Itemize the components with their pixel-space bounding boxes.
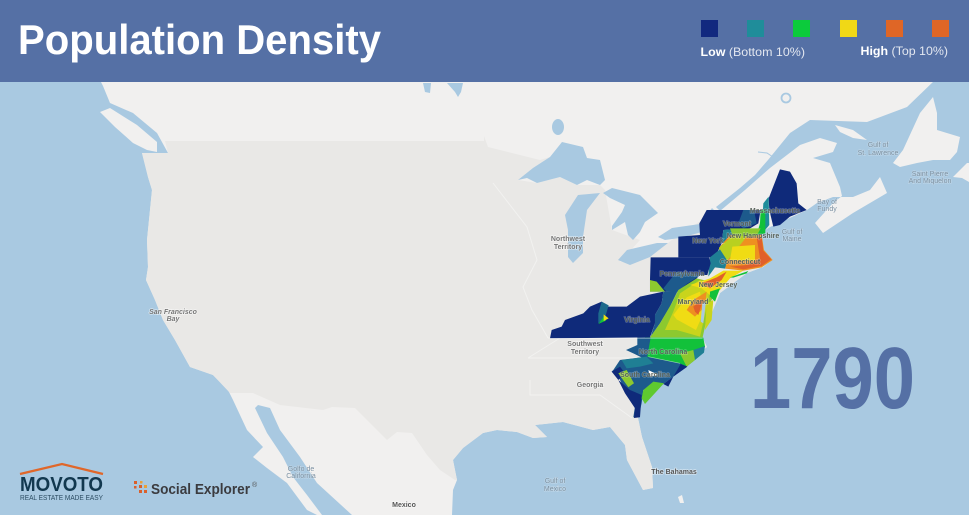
label: Gulf of St. Lawrence: St. Lawrence — [858, 150, 899, 157]
land: Anticosti Island — [835, 125, 867, 140]
label: Gulf of Maine: Maine — [782, 236, 802, 243]
label: Golfo de California: Golfo de — [288, 466, 314, 473]
label: Saint Pierre and Miquelon: Saint Pierre — [912, 171, 948, 178]
water: northern lakes — [552, 119, 564, 135]
Pennsylvania — [650, 257, 711, 292]
logo: Movoto: REAL ESTATE MADE EASY — [20, 493, 103, 502]
label: Maryland: Maryland — [678, 299, 708, 306]
label: New Jersey: New Jersey — [699, 282, 737, 289]
legend — [700, 20, 949, 59]
label: San Francisco Bay: Bay — [167, 316, 181, 323]
label: Gulf of St. Lawrence: Gulf of — [868, 142, 888, 149]
label: Pennsylvania: Pennsylvania — [660, 271, 704, 278]
label: Gulf of Mexico: Gulf of — [545, 478, 565, 485]
New York — [678, 210, 761, 257]
year: 1790: 1790 — [750, 330, 915, 427]
land: United States interior — [142, 136, 772, 490]
label: New Hampshire: New Hampshire — [727, 233, 779, 240]
label: Virginia: Virginia — [624, 317, 650, 324]
label: Northwest Territory: Northwest — [551, 236, 585, 243]
label: Massachusetts: Massachusetts — [750, 208, 800, 215]
label: Bay of Fundy: Fundy — [817, 206, 837, 213]
label: Gulf of Mexico: Mexico — [544, 486, 566, 493]
southern New England base — [718, 235, 773, 271]
logo: Movoto — [20, 464, 103, 502]
label: San Francisco Bay: San Francisco — [149, 309, 197, 316]
legend label: high: High (Top 10%) — [860, 44, 948, 58]
Virginia and Kentucky — [550, 292, 663, 338]
label: Saint Pierre and Miquelon: And Miquelon — [909, 178, 952, 185]
Connecticut valley — [730, 228, 761, 237]
label: Georgia: Georgia — [577, 382, 603, 389]
land: North America mainland — [100, 80, 935, 515]
label: Bay of Fundy: Bay of — [817, 199, 837, 206]
label: New York: New York — [692, 238, 724, 245]
label: Golfo de California: California — [286, 473, 316, 480]
water: Lake Superior — [518, 142, 605, 185]
label: Vermont: Vermont — [723, 221, 752, 228]
choropleth: population density by county, 1790 — [550, 169, 807, 418]
North Carolina — [645, 338, 705, 367]
title: Population Density — [18, 16, 382, 63]
logo: Movoto: MOVOTO — [20, 474, 103, 496]
South Carolina — [612, 357, 687, 417]
label: Mexico: Mexico — [392, 502, 416, 509]
New England inland strips — [762, 197, 769, 234]
label: North Carolina: North Carolina — [639, 349, 687, 356]
water: Lake Huron — [603, 188, 658, 240]
logo: Social Explorer: Social Explorer — [151, 481, 250, 498]
territory borders — [493, 183, 650, 418]
label: The Bahamas: The Bahamas — [651, 469, 697, 476]
label: Gulf of Maine: Gulf of — [782, 229, 802, 236]
water: Lake Ontario — [658, 208, 716, 240]
Chesapeake piedmont — [650, 278, 717, 337]
water: Lake Erie — [618, 243, 668, 265]
Hudson valley — [708, 249, 727, 277]
Maine — [769, 169, 807, 227]
label: Connecticut: Connecticut — [720, 259, 761, 266]
legend label: low: Low (Bottom 10%) — [700, 45, 805, 59]
label: Southwest Territory: Territory — [571, 349, 599, 356]
state border lines — [550, 317, 703, 363]
label: Northwest Territory: Territory — [554, 244, 582, 251]
map labels — [149, 142, 952, 509]
label: South Carolina: South Carolina — [620, 372, 670, 379]
header bar — [0, 0, 969, 82]
Delaware peninsula and New Jersey — [705, 300, 713, 330]
land: Newfoundland — [893, 97, 960, 167]
water: Lake Michigan — [565, 193, 600, 263]
logo: Social Explorer: ® — [252, 481, 258, 489]
land: Vancouver Island — [100, 108, 157, 152]
label: Southwest Territory: Southwest — [567, 341, 603, 348]
